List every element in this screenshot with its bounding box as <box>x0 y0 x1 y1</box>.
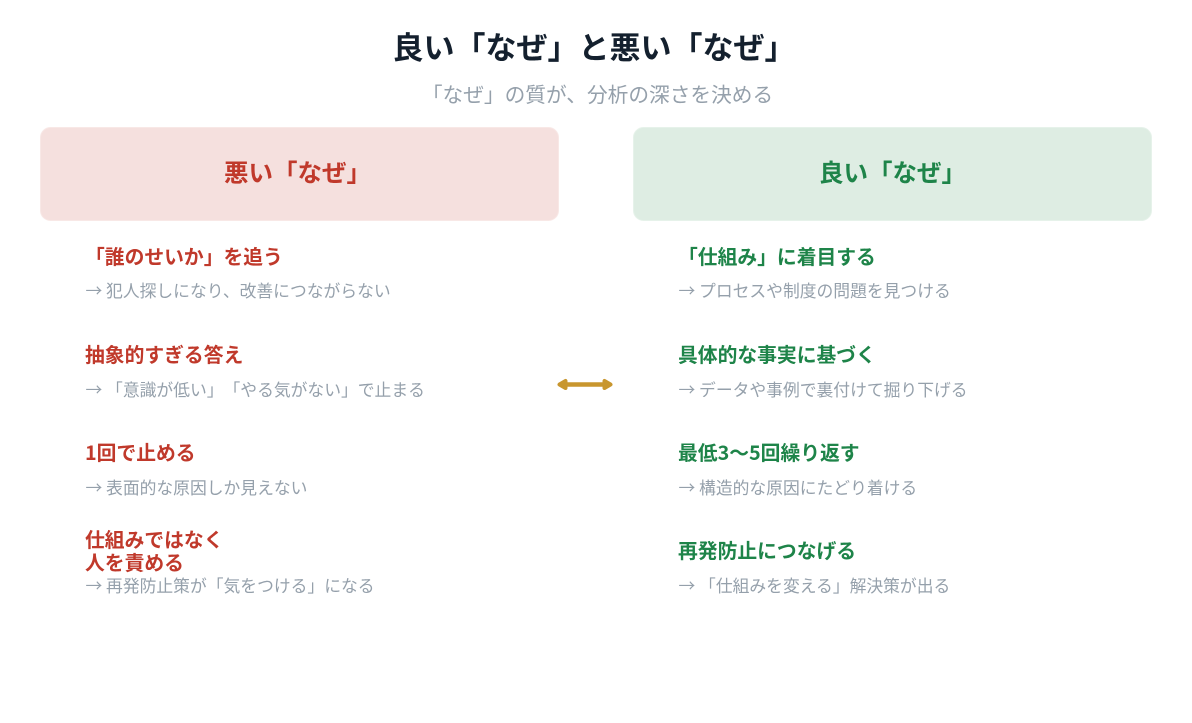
bad item 3 <box>85 437 307 499</box>
bad item 2: 抽象的すぎる答え <box>85 339 243 368</box>
bad item 4: → 再発防止策が「気をつける」になる <box>86 573 375 597</box>
panel: bad why header <box>40 128 558 220</box>
good item 3: → 構造的な原因にたどり着ける <box>678 475 917 499</box>
bad item 4: 仕組みではなく <box>85 524 223 553</box>
good item 2: → データや事例で裏付けて掘り下げる <box>678 377 968 401</box>
good item 3: 最低3〜5回繰り返す <box>678 437 860 466</box>
good item 1: 「仕組み」に着目する <box>678 241 876 270</box>
bad item 3: 1回で止める <box>85 437 196 466</box>
panel: good why header: 良い「なぜ」 <box>819 154 966 190</box>
bad item 4: 人を責める <box>85 547 184 576</box>
bad item 1 <box>85 241 391 302</box>
good item 1: → プロセスや制度の問題を見つける <box>678 278 951 302</box>
good item 4 <box>678 535 950 597</box>
panel: good why header <box>634 128 1152 220</box>
good item 2: 具体的な事実に基づく <box>678 339 876 368</box>
panel: bad why header: 悪い「なぜ」 <box>224 154 371 190</box>
good item 1 <box>678 241 951 302</box>
bad item 3: → 表面的な原因しか見えない <box>86 475 307 499</box>
bad item 2: → 「意識が低い」「やる気がない」で止まる <box>86 377 425 401</box>
good item 4: → 「仕組みを変える」解決策が出る <box>678 573 950 597</box>
icon: double arrow <box>560 381 610 388</box>
bad item 2 <box>85 339 425 401</box>
bad item 1: → 犯人探しになり、改善につながらない <box>86 278 391 302</box>
subtitle: 「なぜ」の質が、分析の深さを決める <box>422 78 773 108</box>
bad item 1: 「誰のせいか」を追う <box>85 241 283 270</box>
title: 良い「なぜ」と悪い「なぜ」 <box>392 23 796 68</box>
good item 3 <box>678 437 917 499</box>
good item 2 <box>678 339 968 401</box>
good item 4: 再発防止につなげる <box>678 535 856 564</box>
bad item 4 <box>85 524 375 597</box>
